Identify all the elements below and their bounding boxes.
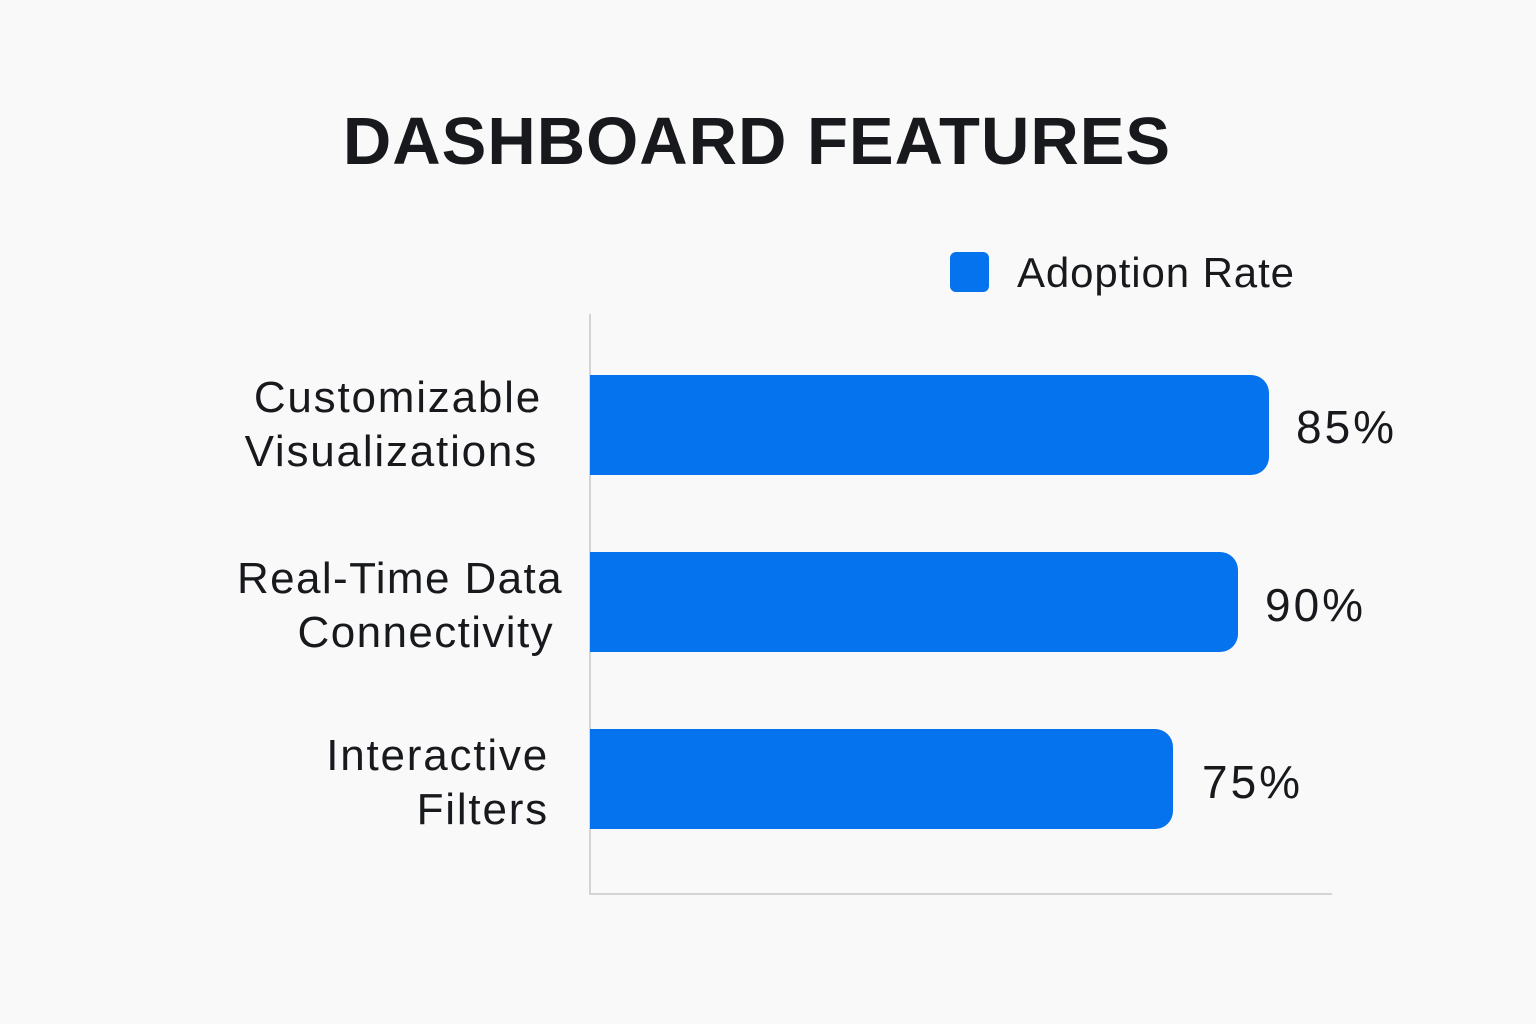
value 90%: 90% [1265, 579, 1366, 631]
legend [950, 249, 1295, 296]
bar: 75% [590, 729, 1173, 829]
label: Customizable Visualizations: Customizable [254, 373, 542, 422]
bar: 90% [590, 552, 1238, 652]
chart axes [589, 314, 1332, 895]
label: Real-Time Data Connectivity [237, 554, 563, 657]
label: Interactive Filters: Interactive [326, 731, 549, 780]
label: Customizable Visualizations [244, 373, 542, 476]
label: Interactive Filters: Filters [417, 785, 549, 834]
legend swatch [950, 252, 989, 292]
label: Real-Time Data Connectivity: Connectivity [298, 608, 554, 657]
title: DASHBOARD FEATURES [343, 104, 1171, 179]
bar: 85% [590, 375, 1269, 475]
value 85%: 85% [1296, 401, 1397, 453]
value 75%: 75% [1202, 756, 1303, 808]
label: Real-Time Data Connectivity: Real-Time Data [237, 554, 563, 603]
legend text: Adoption Rate [1017, 249, 1295, 296]
label: Interactive Filters [326, 731, 549, 834]
label: Customizable Visualizations: Visualizations [245, 427, 538, 476]
